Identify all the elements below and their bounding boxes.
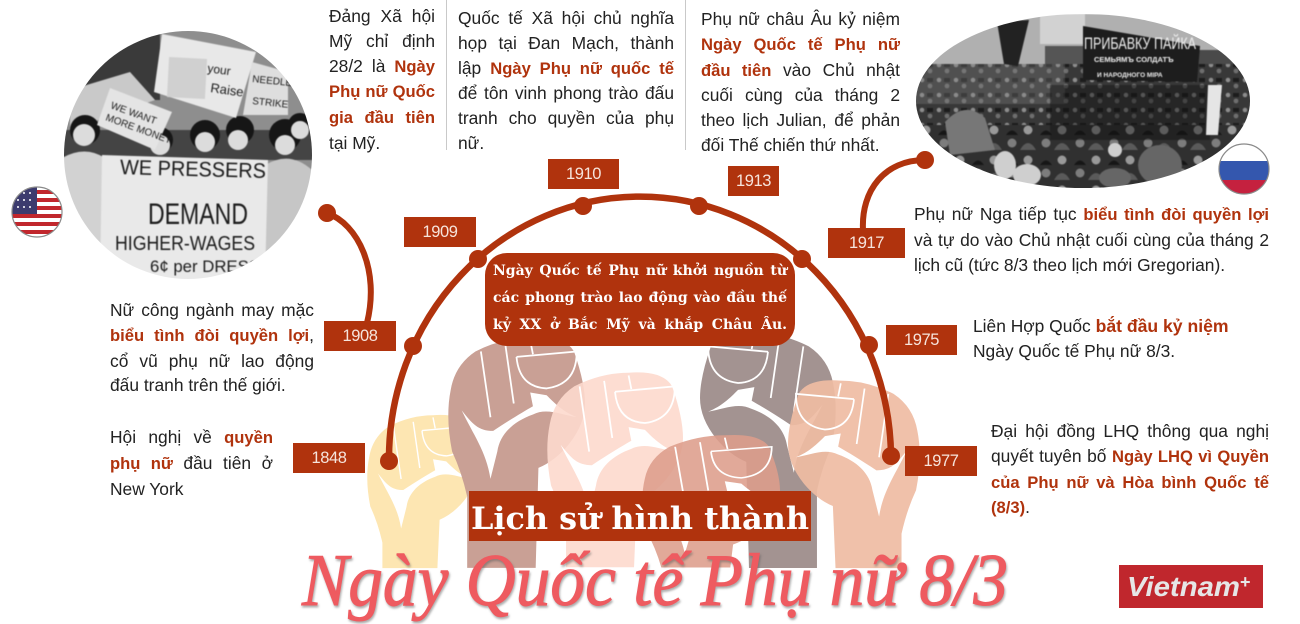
text block: 1910 Socialist International: Quốc tế Xã hội chủ nghĩa [458,8,674,28]
text block: 1913 European women: theo lịch Julian, để phản [701,110,900,130]
callout: origin of the day: Ngày Quốc tế Phụ nữ khởi nguồn từ [493,263,787,279]
text block: 1909 American Socialist Party: tại Mỹ. [329,133,380,153]
text: photo signs: MORE MONEY [104,112,173,147]
chart: timeline arc with nodes [318,151,934,470]
text block: 1909 American Socialist Party: Mỹ chỉ định [329,31,435,51]
text block: 1975 United Nations [973,316,1229,361]
text block: 1977 UN General Assembly: Đại hội đồng LHQ thông qua nghị [991,421,1269,441]
text: protest banner: И НАРОДНОГО МІРА [1097,72,1163,79]
icon: salmon fist [642,435,780,568]
text block: 1913 European women: đối Thế chiến thứ nhất. [701,135,880,155]
text block: 1910 Socialist International: nữ. [458,133,484,153]
text: photo signs: DEMAND [148,198,248,231]
text: photo signs: NEEDLE [252,74,293,89]
year label: 1910: 1910 [566,165,601,183]
text block: 1909 American Socialist Party: gia đầu tiên [329,108,435,127]
year label: 1910 [548,159,619,189]
text block: 1909 American Socialist Party: Phụ nữ Quốc [329,82,435,101]
icon: grey brown fist [700,332,836,568]
icon: rose brown fist [448,337,585,568]
year label: 1908 [324,321,396,351]
callout: origin of the day [485,253,795,346]
text block: 1913 European women: đầu tiên vào Chủ nhật [701,60,900,80]
title: Ngày Quốc tế Phụ nữ 8/3 [301,540,1008,622]
text block: 1908 garment workers: Nữ công ngành may mặc [110,300,314,320]
text block: 1913 European women: cuối cùng của tháng 2 [701,85,900,105]
text block: 1909 American Socialist Party [329,6,435,153]
year label: 1913 [728,166,779,196]
text block: 1917 Russian women: lịch cũ (tức 8/3 theo lịch mới Gregorian). [914,255,1225,275]
icon: light pink fist [547,372,683,567]
text block: 1975 United Nations: Liên Hợp Quốc bắt đầu kỷ niệm [973,316,1229,336]
text: photo signs: 6¢ per DRESS [150,257,260,276]
text block: 1913 European women: Ngày Quốc tế Phụ nữ [701,35,900,54]
text block: 1908 garment workers: đấu tranh trên thế giới. [110,375,286,395]
text: protest banner: СЕМЬЯМЪ СОЛДАТЪ [1094,55,1174,64]
text: protest banner [1084,34,1196,79]
text block: 1910 Socialist International: lập Ngày Phụ nữ quốc tế [458,58,674,78]
text: photo signs: STRIKE [252,96,289,111]
photo: American garment workers protest [60,30,320,280]
text: photo signs: WE PRESSERS [120,156,266,183]
icon: yellow fist [367,415,477,568]
text: photo signs: your [207,61,232,78]
text block: 1977 UN General Assembly [991,421,1269,517]
panel: raised fists illustration [367,332,920,568]
icon: Russian flag [1220,161,1268,194]
logo: Vietnam+: + [1240,572,1251,592]
icon: peach fist [788,380,920,568]
year label: 1909: 1909 [422,223,458,241]
year label: 1848 [293,443,365,473]
text block: 1908 garment workers: cổ vũ phụ nữ lao động [110,351,314,371]
year label: 1975: 1975 [904,331,939,349]
icon: US flag [12,187,62,237]
text block: 1917 Russian women: và tự do vào Chủ nhật cuối cùng của tháng 2 [914,230,1269,250]
text block: 1910 Socialist International: họp tại Đan Mạch, thành [458,33,674,53]
year label: 1917 [828,228,905,258]
text block: 1917 Russian women [914,204,1269,275]
year label: 1917: 1917 [849,234,884,252]
callout: origin of the day: kỷ XX ở Bắc Mỹ và khắp Châu Âu. [493,317,787,333]
text block: 1909 American Socialist Party: 28/2 là Ngày [329,56,435,76]
text: photo signs: Raise [210,80,245,100]
text block: 1909 American Socialist Party: Đảng Xã hội [329,6,435,26]
logo: Vietnam+ [1119,565,1263,608]
text block: 1910 Socialist International: để tôn vinh phong trào đấu [458,83,674,103]
text block: 1913 European women: Phụ nữ châu Âu kỷ niệm [701,9,900,29]
year label: 1848: 1848 [311,449,347,467]
year label: 1977 [905,446,977,476]
text: protest banner: ПРИБАВКУ ПАЙКА [1084,34,1196,53]
heading: history banner: Lịch sử hình thành [471,501,809,537]
photo: Russian women protest [915,14,1255,190]
text block: 1910 Socialist International [458,8,674,153]
text block: 1908 garment workers: biểu tình đòi quyền lợi, [110,325,314,345]
text: photo signs: HIGHER-WAGES [115,233,255,255]
text block: 1977 UN General Assembly: của Phụ nữ và Hòa bình Quốc tế [991,473,1269,492]
text block: 1908 garment workers [110,300,314,395]
text block: 1910 Socialist International: tranh cho quyền của phụ [458,108,674,128]
text block: 1848 New York conference: Hội nghị về quyền [110,427,273,447]
year label: 1913: 1913 [736,172,771,190]
text: photo signs [104,61,293,276]
year label: 1909 [404,217,476,247]
text block: 1848 New York conference [110,427,273,499]
callout: origin of the day: các phong trào lao động vào đầu thế [493,290,787,306]
heading: history banner [469,491,811,541]
logo: Vietnam+: Vietnam [1127,571,1240,602]
text block: 1913 European women [701,9,900,155]
text block: 1977 UN General Assembly: quyết tuyên bố Ngày LHQ vì Quyền [991,446,1269,466]
year label: 1975 [886,325,957,355]
text block: 1977 UN General Assembly: (8/3). [991,497,1030,517]
year label: 1977: 1977 [923,452,959,470]
text block: 1917 Russian women: Phụ nữ Nga tiếp tục biểu tình đòi quyền lợi [914,204,1269,224]
text: photo signs: WE WANT [109,100,158,127]
text block: 1975 United Nations: Ngày Quốc tế Phụ nữ 8/3. [973,341,1175,361]
text block: 1848 New York conference: phụ nữ đầu tiên ở [110,453,273,473]
text block: 1848 New York conference: New York [110,479,183,499]
year label: 1908: 1908 [342,327,378,345]
